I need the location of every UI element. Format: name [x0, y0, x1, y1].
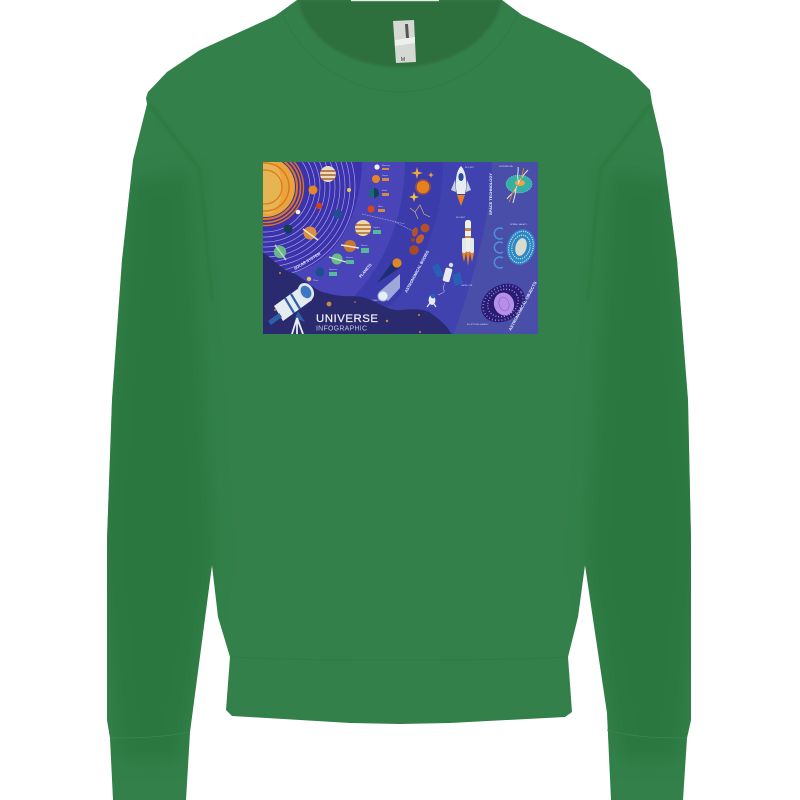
- planet data labels: Jupiter: [373, 226, 380, 229]
- section label: astronomical objects: ASTRONOMICAL OBJECTS: [507, 280, 538, 331]
- sky stars: [274, 272, 421, 333]
- launch rocket: ROCKET: [456, 217, 466, 219]
- planets column: [307, 164, 380, 281]
- satellite: [432, 263, 473, 287]
- section label: planets: PLANETS: [358, 262, 373, 279]
- rocket: [451, 166, 475, 206]
- meteor: [377, 258, 402, 283]
- comet: COMET: [371, 300, 380, 302]
- planet data labels: Venus: [382, 175, 389, 177]
- top white strip: [351, 0, 439, 1]
- planet data labels: Mercury: [382, 164, 391, 167]
- black hole accretion disk: [499, 165, 532, 203]
- galaxy type rings: [494, 228, 503, 268]
- planet data labels: Saturn: [361, 244, 368, 247]
- section label: space technology: SPACE TECHNOLOGY: [488, 173, 493, 215]
- launch rocket: [456, 217, 474, 266]
- neck label: [393, 20, 416, 63]
- astronaut: [427, 283, 445, 307]
- elliptical galaxy: [467, 284, 525, 325]
- background band: solar system: [260, 159, 362, 272]
- background band: astronomical objects: [454, 162, 538, 334]
- section label: solar system: SOLAR SYSTEM: [293, 251, 322, 271]
- comet: [371, 274, 400, 302]
- fabric shading: [107, 169, 691, 758]
- stars and orange star: [409, 167, 434, 202]
- solar system planets: [274, 166, 351, 260]
- hem rib seam: [230, 657, 568, 660]
- collar rib seam: [282, 12, 518, 92]
- left cuff seam: [110, 732, 190, 738]
- black hole accretion disk: SUPERNOVA: [499, 165, 513, 168]
- planet data labels: Pluto: [313, 279, 319, 282]
- title: INFOGRAPHIC: [316, 326, 367, 332]
- background band: planets: [291, 162, 405, 296]
- spiral galaxy: SPIRAL GALAXY: [510, 223, 528, 226]
- sweatshirt product image: [107, 0, 691, 800]
- planet data labels: Uranus: [346, 256, 354, 259]
- title: [316, 314, 378, 330]
- sweatshirt silhouette: [107, 0, 691, 800]
- rocket: ROCKET: [465, 167, 475, 169]
- neck label: M: [401, 57, 405, 63]
- planet data labels: Earth: [382, 189, 388, 192]
- asteroids: [409, 224, 429, 255]
- title: UNIVERSE: [316, 313, 378, 325]
- spiral galaxy: [506, 224, 536, 265]
- background band: astronomical bodies: [406, 204, 424, 230]
- collar inner: [298, 0, 502, 67]
- orbits: [263, 162, 356, 273]
- constellation: [410, 205, 430, 219]
- section label: astronomical bodies: ASTRONOMICAL BODIES: [403, 249, 430, 293]
- bottom dark sky: [260, 250, 453, 337]
- sun: [263, 162, 304, 226]
- satellite: SATELLITE: [461, 284, 473, 287]
- planet data labels: Mars: [378, 205, 384, 208]
- elliptical galaxy: ELLIPTICAL GALAXY: [467, 323, 489, 326]
- telescope: [268, 283, 314, 334]
- right cuff seam: [607, 730, 687, 738]
- planet data labels: Neptune: [329, 268, 338, 271]
- planet data labels: [313, 164, 391, 282]
- background band: space technology: [386, 162, 492, 334]
- dotted connector lines: [362, 214, 415, 232]
- poster: universe infographic: [263, 162, 538, 334]
